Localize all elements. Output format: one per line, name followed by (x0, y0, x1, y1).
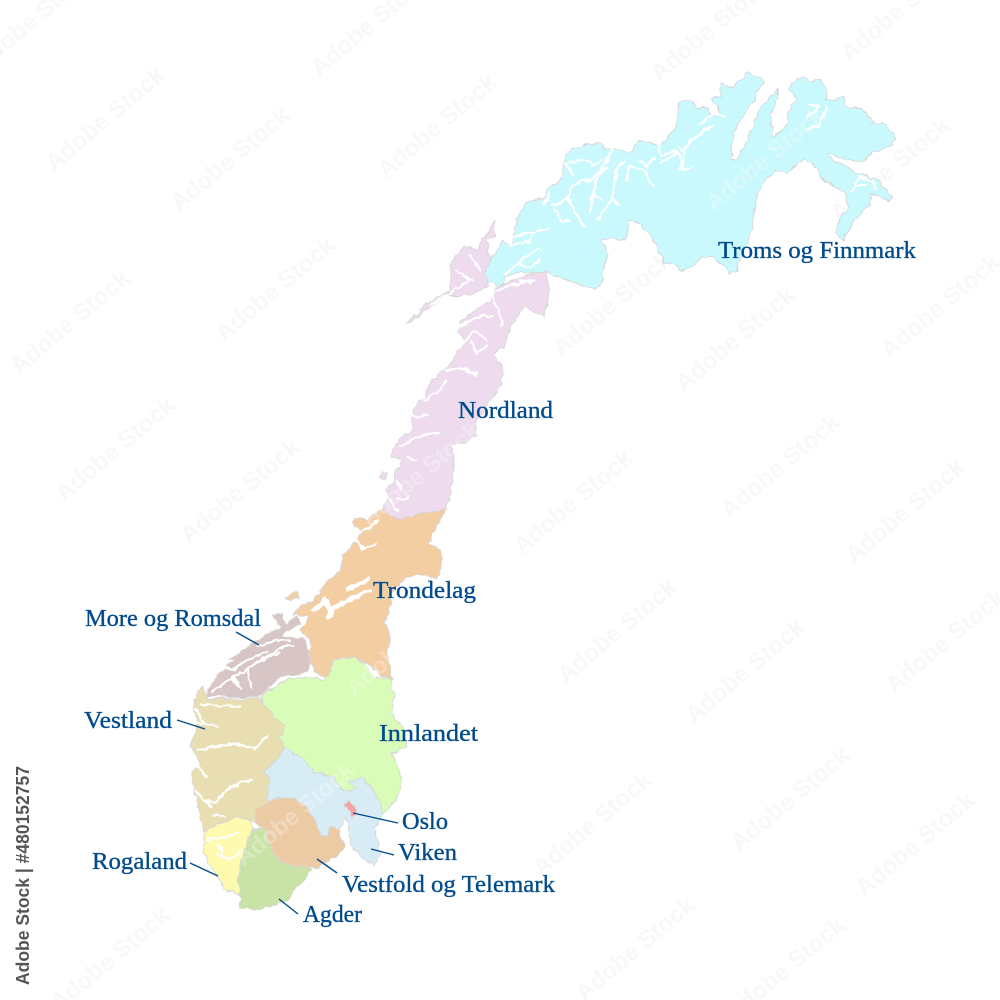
label: Viken: Viken (398, 840, 457, 866)
watermark pattern: Adobe Stock (50, 391, 181, 507)
label: Vestland: Vestland (84, 708, 172, 734)
label: Nordland: Nordland (458, 398, 553, 424)
watermark pattern: Adobe Stock (175, 433, 306, 549)
leader line: Vestland (177, 720, 205, 729)
region: Nordland (378, 220, 548, 520)
watermark pattern: Adobe Stock (715, 408, 846, 524)
region: Agder (238, 827, 312, 910)
watermark pattern: Adobe Stock (547, 246, 678, 362)
watermark pattern: Adobe Stock (680, 613, 811, 729)
coastal islands (285, 591, 300, 601)
watermark over map (60, 101, 831, 872)
region: Innlandet (262, 657, 407, 813)
fjords: Lofoten (430, 255, 480, 305)
fjords: Rogaland (207, 832, 238, 860)
watermark over map: Adobe Stock (700, 101, 831, 217)
watermark pattern: Adobe Stock (670, 281, 801, 397)
watermark pattern: Adobe Stock (372, 68, 503, 184)
region: Rogaland (203, 817, 253, 895)
watermark over map: Adobe Stock (340, 586, 471, 702)
leader line: Oslo (353, 813, 398, 823)
leader line: More og Romsdal (236, 632, 259, 645)
region: Trondelag (285, 508, 447, 680)
leader line: Agder (279, 899, 298, 914)
leader line: Rogaland (190, 863, 218, 876)
watermark over map: Adobe Stock (355, 416, 486, 532)
watermark pattern: Adobe Stock (508, 444, 639, 560)
label: Agder: Agder (303, 902, 362, 928)
watermark pattern: Adobe Stock (527, 766, 658, 882)
region: Vestland (190, 687, 285, 832)
Lofoten islands (405, 220, 495, 325)
fjords: Finnmark (680, 103, 877, 192)
watermark pattern: Adobe Stock (840, 453, 971, 569)
fjords: Vestland (193, 703, 267, 817)
label: Oslo: Oslo (402, 809, 448, 835)
region: More og Romsdal (205, 613, 310, 698)
watermark pattern: Adobe Stock (210, 231, 341, 347)
fjords: More og Romsdal (212, 640, 293, 692)
region: Viken (265, 748, 383, 865)
watermark pattern: Adobe Stock (850, 786, 981, 902)
watermark pattern: Adobe Stock (5, 264, 136, 380)
watermark pattern: Adobe Stock (725, 741, 856, 857)
map of Norway regions (190, 73, 895, 910)
watermark over map: Adobe Stock (470, 106, 601, 222)
label: Innlandet: Innlandet (379, 721, 478, 747)
label: More og Romsdal: More og Romsdal (85, 606, 261, 632)
fjords: Troms (480, 133, 700, 277)
small fjords: Trondelag coast (357, 520, 380, 550)
watermark pattern: Adobe Stock (825, 111, 956, 227)
leader line: Viken (371, 849, 394, 855)
small island (378, 472, 388, 479)
label: Trondelag: Trondelag (373, 578, 476, 604)
fjords: Trondelag (313, 578, 370, 618)
label: Vestfold og Telemark: Vestfold og Telemark (342, 872, 555, 898)
region: Vestfold og Telemark (255, 798, 345, 870)
watermark over map: Adobe Stock (230, 756, 361, 872)
leader line: Vestfold og Telemark (317, 859, 337, 873)
stock credit: Adobe Stock | #480152757 (13, 766, 33, 985)
label: Rogaland: Rogaland (92, 849, 187, 875)
watermark pattern: Adobe Stock (40, 61, 171, 177)
region: Troms og Finnmark (480, 73, 895, 290)
region: Oslo (345, 800, 357, 818)
watermark pattern: Adobe Stock (552, 573, 683, 689)
label: Troms og Finnmark: Troms og Finnmark (718, 238, 916, 264)
watermark over map: Adobe Stock (60, 731, 191, 847)
fjords: Nordland (390, 280, 535, 510)
watermark pattern: Adobe Stock (165, 101, 296, 217)
